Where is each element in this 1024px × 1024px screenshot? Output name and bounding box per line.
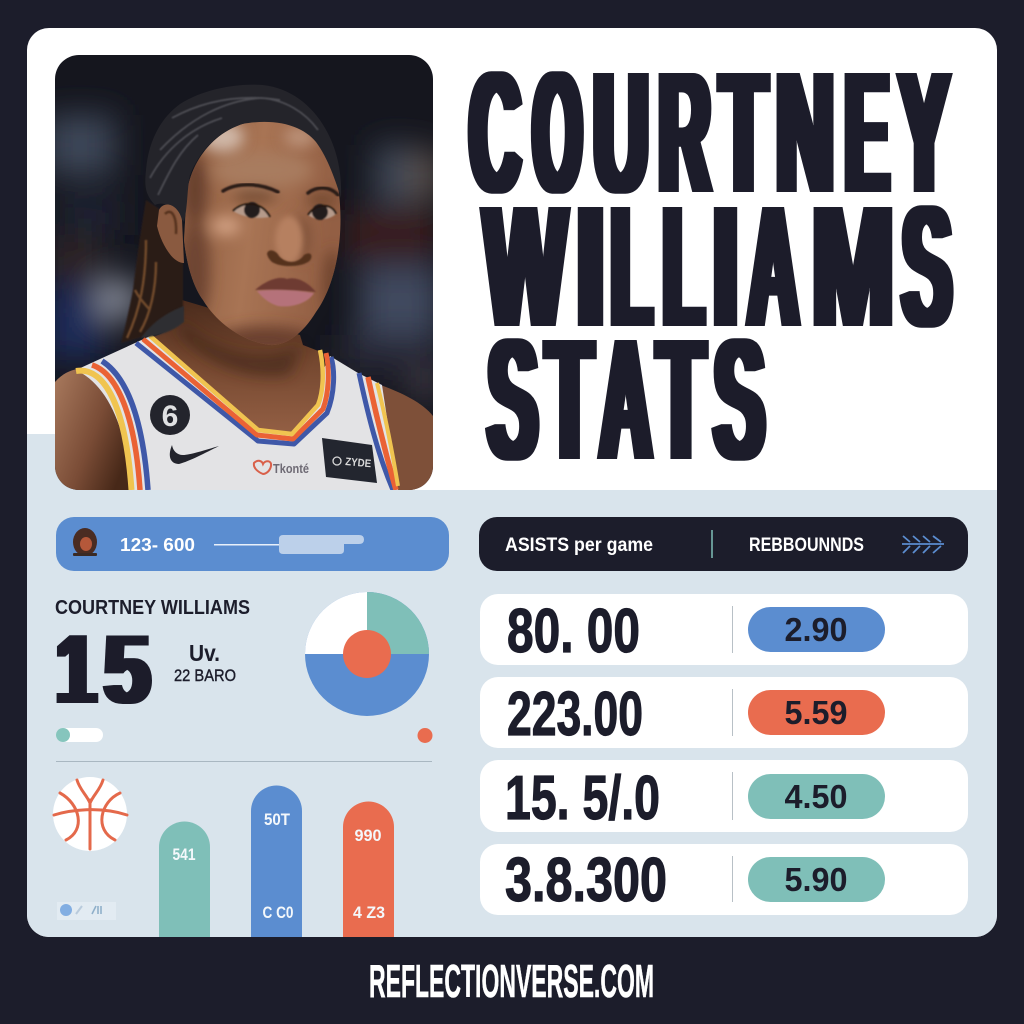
bar chart — [159, 786, 394, 937]
jersey logo — [254, 461, 309, 476]
title line 1: O — [533, 35, 581, 229]
jersey sponsor patch — [322, 438, 377, 483]
pie chart — [305, 592, 429, 716]
stat row 1: 2.90 — [784, 611, 848, 648]
right shoulder — [378, 384, 433, 490]
face shading — [180, 122, 343, 354]
title line 2: I — [713, 170, 738, 363]
small legend — [57, 902, 116, 920]
title line 1: U — [594, 37, 648, 230]
hair — [145, 85, 341, 222]
player photo — [45, 55, 440, 490]
stat row 2 — [480, 677, 968, 749]
swoosh — [170, 445, 219, 464]
bar chart: 541 — [172, 845, 196, 864]
title line 2 — [484, 169, 951, 364]
title line 3: S — [714, 304, 765, 497]
title line 2: M — [812, 170, 894, 363]
big number 15: 5 — [104, 616, 150, 725]
player summary: 22 BARO — [174, 666, 236, 685]
title line 2: W — [484, 171, 567, 364]
title line 1: E — [845, 36, 889, 229]
neck and chest — [150, 300, 324, 433]
title — [470, 35, 951, 497]
bar chart: C C0 — [262, 903, 294, 922]
mini portrait icon — [73, 528, 97, 556]
left shoulder — [55, 369, 133, 490]
mouth — [255, 278, 316, 306]
title line 1: T — [720, 36, 767, 230]
stat row 2: 5.59 — [784, 694, 848, 731]
nose — [267, 216, 311, 266]
jersey number badge — [150, 395, 190, 435]
player summary: Uv. — [189, 640, 220, 666]
red dot — [418, 728, 432, 743]
jersey sponsor patch: ZYDE — [345, 456, 372, 470]
ear — [157, 205, 184, 263]
stat row 3: 4.50 — [784, 778, 848, 815]
stat row 3 — [480, 760, 968, 833]
stat row 4: 5.90 — [784, 861, 848, 898]
stat row 4: 3.8.300 — [505, 846, 667, 915]
blue info bar — [56, 517, 449, 571]
table header: ASISTS per game — [505, 535, 653, 556]
braid — [121, 200, 184, 343]
title line 2: S — [902, 171, 951, 364]
table header — [479, 517, 968, 571]
jersey — [76, 336, 398, 490]
left eye — [233, 202, 270, 218]
player summary: COURTNEY WILLIAMS — [55, 597, 250, 619]
right eye — [308, 204, 336, 220]
title line 3 — [488, 303, 765, 497]
eyebrows — [223, 185, 278, 192]
title line 1: Y — [899, 36, 949, 230]
title line 2: L — [611, 169, 652, 363]
bar chart: 4 Z3 — [353, 903, 385, 922]
title line 3: A — [600, 303, 651, 497]
toggle — [56, 728, 103, 742]
title line 1 — [470, 35, 949, 230]
jersey number badge: 6 — [162, 400, 178, 433]
stat row 4 — [480, 844, 968, 915]
icon: chevron arrows — [902, 536, 944, 553]
title line 3: S — [488, 303, 538, 497]
title line 1: N — [776, 35, 834, 229]
stat row 1 — [480, 594, 968, 666]
bar chart: 50T — [264, 810, 291, 829]
title line 3: T — [657, 304, 705, 496]
player summary — [55, 597, 250, 725]
stat row 1: 80. 00 — [507, 597, 640, 666]
big number 15 — [56, 615, 150, 725]
blue info bar: 123- 600 — [120, 535, 195, 555]
stat row 2: 223.00 — [507, 680, 643, 749]
icon: basketball — [53, 777, 127, 851]
title line 2: L — [663, 169, 704, 363]
table header: REBBOUNNDS — [749, 535, 864, 556]
title line 1: C — [470, 36, 520, 229]
blurred arena crowd — [45, 115, 440, 400]
title line 1: R — [659, 36, 710, 230]
jersey trim — [76, 336, 398, 490]
jersey logo: Tkonté — [273, 461, 309, 476]
title line 2: I — [576, 170, 605, 363]
bar chart: 990 — [354, 826, 382, 845]
title line 2: A — [748, 170, 798, 363]
big number 15: 1 — [56, 615, 96, 725]
title line 3: T — [546, 303, 593, 497]
stat row 3: 15. 5/.0 — [505, 764, 660, 833]
footer website: REFLECTIONVERSE.COM — [369, 955, 654, 1007]
face — [145, 85, 343, 354]
